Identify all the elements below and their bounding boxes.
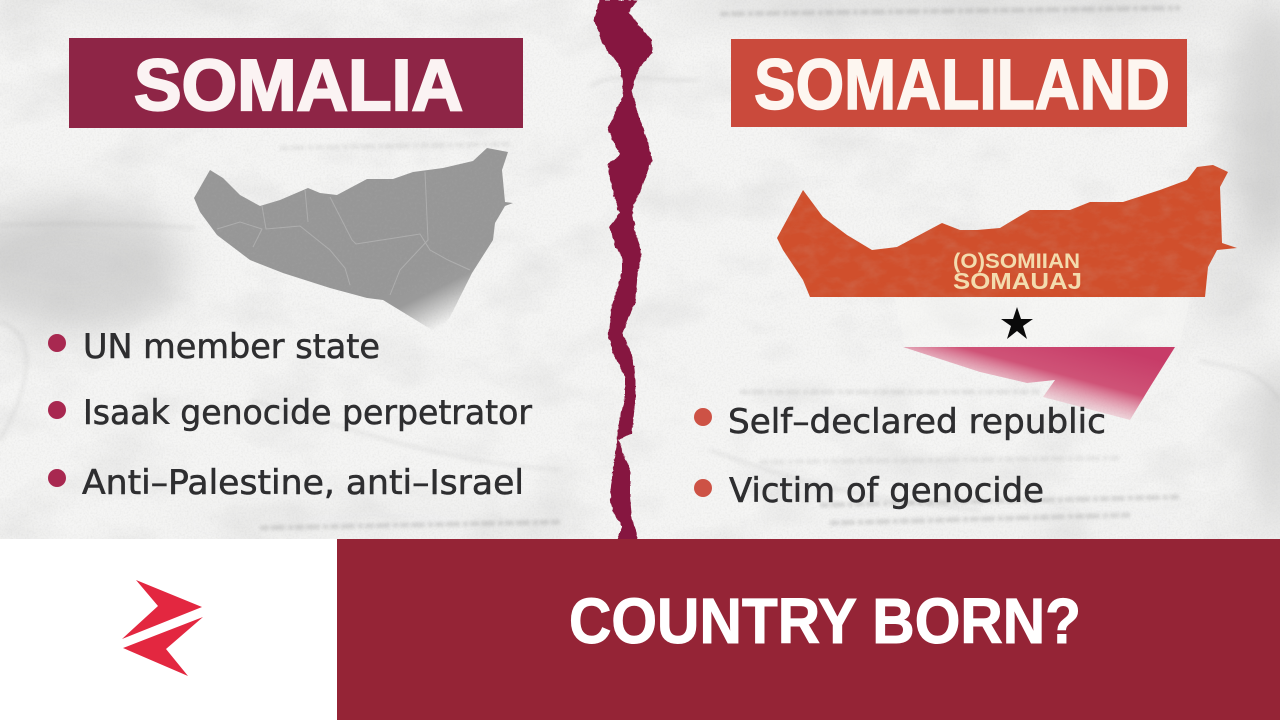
title: COUNTRY BORN? xyxy=(569,585,1081,657)
icon: black star xyxy=(1001,307,1033,339)
bullet: Isaak genocide perpetrator: Isaak genocide perpetrator xyxy=(83,393,532,432)
bullet: Anti-Palestine, anti-Israel: Anti–Palestine, anti–Israel xyxy=(82,463,524,502)
flag stripe: top orange-red xyxy=(775,160,1240,300)
map: Somalia in grey xyxy=(190,145,515,333)
panel: title bar xyxy=(337,539,1280,720)
heading: Somalia banner: SOMALIA xyxy=(134,46,463,126)
list: Somaliland facts xyxy=(694,402,1106,510)
flag inscription: SOMAUAJ xyxy=(953,268,1082,294)
map: Somaliland as flag xyxy=(775,160,1240,420)
heading: Somaliland banner: SOMALILAND xyxy=(754,46,1170,125)
flag stripe: middle white xyxy=(895,298,1190,345)
flag inscription xyxy=(953,250,1082,294)
heading: Somalia banner xyxy=(69,38,523,128)
bullet: Victim of genocide: Victim of genocide xyxy=(729,471,1044,510)
bullet: Self-declared republic: Self–declared republic xyxy=(728,402,1106,441)
bullet: UN member state: UN member state xyxy=(83,327,380,366)
icon: red arrow logo xyxy=(122,580,203,676)
list: Somalia facts xyxy=(48,327,532,502)
flag inscription: (O)SOMIIAN xyxy=(953,250,1080,273)
flag stripe: bottom pink xyxy=(903,347,1175,420)
panel: logo area xyxy=(0,539,337,720)
torn divider xyxy=(594,0,652,540)
paper background xyxy=(0,0,1280,540)
panel: Somalia xyxy=(48,38,532,502)
panel: Somaliland xyxy=(694,39,1240,510)
